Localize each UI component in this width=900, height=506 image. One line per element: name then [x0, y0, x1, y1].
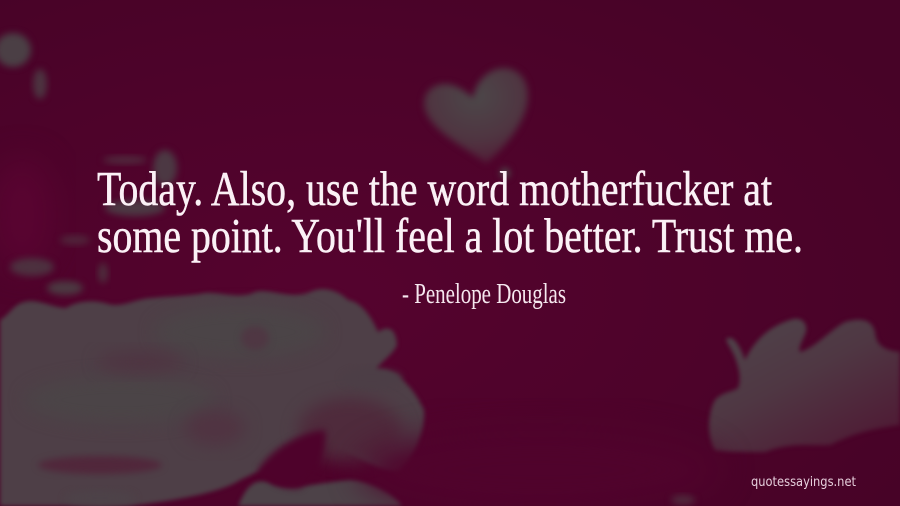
icon: heart — [424, 68, 528, 178]
clouds: top left — [0, 33, 177, 295]
clouds: lower left bank — [0, 289, 424, 506]
quote text — [97, 161, 803, 263]
clouds: lower right — [360, 319, 900, 506]
watermark: quotessayings.net — [751, 475, 856, 490]
author attribution: - Penelope Douglas — [402, 279, 566, 310]
